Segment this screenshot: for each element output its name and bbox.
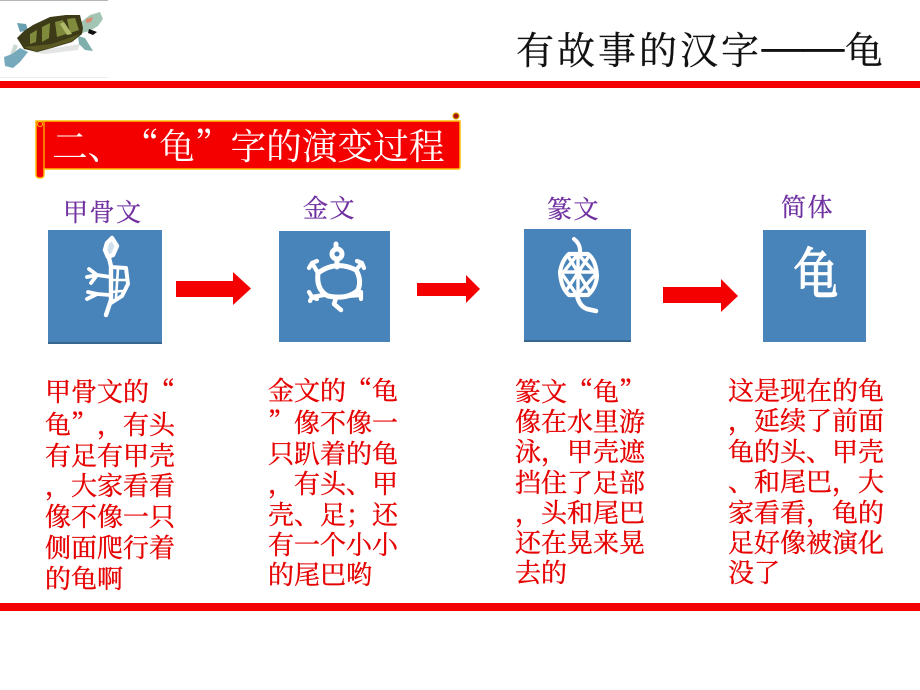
label: 篆文: 篆文	[547, 197, 600, 224]
text: simplified description	[728, 377, 884, 588]
text: seal script description: 去的	[515, 559, 567, 588]
text: bronze description: 有一个小小	[268, 531, 398, 560]
text: bronze description: 的尾巴哟	[268, 561, 372, 590]
text: bronze description	[268, 371, 398, 590]
glyph: 龟: 龟	[794, 244, 838, 306]
text: seal script description: ，头和尾巴	[515, 499, 645, 528]
text: seal script description: 像在水里游	[515, 408, 645, 437]
text: bronze description: 金文的“龟	[268, 371, 398, 408]
banner text: 二、“龟”字的演变过程	[52, 119, 445, 170]
text: simplified description: 没了	[728, 559, 780, 588]
text: simplified description: 足好像被演化	[728, 529, 884, 558]
panel: simplified glyph	[763, 230, 866, 342]
panel: oracle bone glyph	[48, 230, 162, 344]
text: oracle bone description: 侧面爬行着	[45, 534, 175, 563]
text: oracle bone description: 像不像一只	[45, 503, 175, 532]
label: 甲骨文: 甲骨文	[63, 200, 143, 227]
text: simplified description: 家看看，龟的	[728, 499, 884, 528]
text: simplified description: 龟的头、甲壳	[728, 438, 884, 467]
text: oracle bone description: 的龟啊	[45, 565, 123, 594]
text: simplified description: ，延续了前面	[728, 407, 884, 436]
text: oracle bone description: 龟”，有头	[45, 405, 175, 442]
panel: seal script glyph	[524, 229, 631, 342]
text: seal script description: 泳，甲壳遮	[515, 438, 645, 467]
bottom red rule	[0, 603, 920, 611]
text: seal script description: 挡住了足部	[515, 469, 645, 498]
panel: bronze glyph	[279, 231, 390, 342]
text: bronze description: 只趴着的龟	[268, 440, 398, 469]
text: seal script description: 还在晃来晃	[515, 529, 645, 558]
text: seal script description	[515, 372, 645, 588]
banner: section heading	[35, 112, 461, 179]
text: oracle bone description	[45, 372, 175, 594]
text: bronze description: ，有头、甲	[268, 470, 398, 499]
text: oracle bone description: ，大家看看	[45, 472, 175, 501]
text: bronze description: 壳、足；还	[268, 501, 398, 530]
text: oracle bone description: 甲骨文的“	[45, 372, 175, 409]
text: bronze description: ”像不像一	[268, 403, 398, 440]
text: oracle bone description: 有足有甲壳	[45, 442, 175, 471]
arrow 2	[417, 275, 480, 303]
icon: turtle photo	[0, 0, 108, 78]
arrow 1	[176, 272, 251, 305]
text: simplified description: 这是现在的龟	[728, 377, 884, 406]
arrow 3	[663, 279, 738, 312]
label: 金文: 金文	[303, 196, 356, 223]
top red rule	[0, 81, 920, 88]
label: 简体: 简体	[781, 195, 834, 222]
title: 有故事的汉字——龟	[516, 23, 886, 73]
text: seal script description: 篆文“龟”	[515, 372, 645, 409]
text: simplified description: 、和尾巴，大	[728, 468, 884, 497]
